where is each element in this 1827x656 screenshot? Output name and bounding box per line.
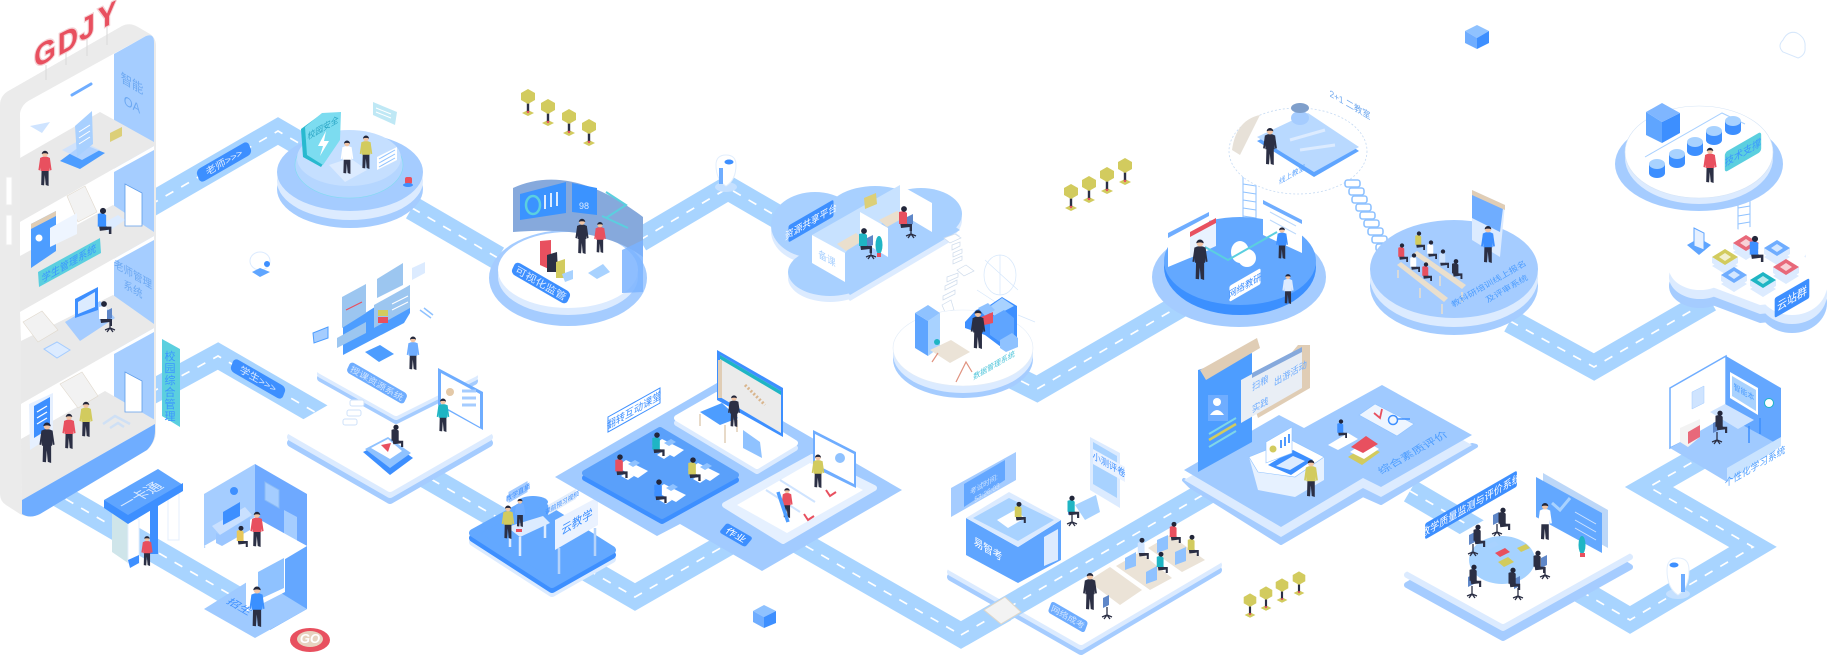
go sticker: GO [300,631,320,646]
floor 2 chart panels [31,211,77,268]
cloud teaching platform [473,480,612,593]
platform: online exam [951,482,1218,651]
rollup sign [1472,190,1505,257]
campus management sign: 管 [164,397,176,411]
person [249,587,265,627]
wire globe [977,255,1035,322]
floor 1 person [38,151,52,186]
tag: 数据管理系统 [973,348,1015,382]
right document panel: 实践 [1252,394,1269,416]
answer board [813,430,856,488]
student desks [616,439,720,504]
cloud: resource sharing platform [771,185,962,302]
tablet exercise pad [725,457,874,541]
person [407,337,419,370]
timer sign: 53:26:03 [974,481,1000,504]
link lines [1645,113,1745,157]
floating panel [373,102,397,125]
top cube [1465,25,1489,49]
person [971,310,985,349]
upper platform [321,327,474,420]
letters GDJY [34,0,117,80]
labels: 线上教室 [1279,161,1305,186]
label: teacher system: 系统 [123,278,143,301]
seated test taker [1067,495,1100,526]
meeting people [1467,508,1550,600]
floor 3 person [99,301,115,332]
cube stack [965,297,1018,352]
wedge [1232,115,1260,155]
server cabinet [915,305,940,356]
speaker [72,84,91,95]
monitor [343,285,410,362]
person [1263,128,1277,165]
floor [1670,416,1781,482]
pale rim [1669,234,1827,324]
cloud rim [771,192,962,302]
blue rim [1669,243,1827,333]
timer sign [951,452,1016,517]
panels [337,262,425,348]
phone shell [0,24,156,516]
one-card gate [104,469,183,568]
tag [1775,278,1809,318]
campus management sign [162,339,180,427]
dual classroom caption: 2+1 二教室 [1330,87,1370,123]
poster [1692,386,1704,409]
board: 智能本 [1734,381,1754,403]
road tag: students [230,358,286,400]
person [392,425,403,447]
road tag: teachers: 老师>>> [204,146,244,178]
tag: 授课资源系统 [349,364,405,403]
large monitor [717,350,783,437]
letters GDJY: D [58,18,78,63]
platform: teaching quality monitoring [1407,468,1630,638]
disk: dual teacher classroom [1229,87,1370,194]
doors [125,184,142,226]
teacher [1538,503,1552,540]
tag: 网络成考 [1050,603,1086,631]
plant [876,236,882,257]
wall text: 备课 [818,247,836,270]
person [1750,236,1763,262]
tag: 可视化监管 [513,264,568,303]
label: 及评审系统 [1484,272,1530,304]
cloud: cloud sites [1669,225,1827,333]
base [555,383,902,571]
cloud outline top right [1780,32,1805,58]
table items [1486,541,1530,567]
wall white 3 [21,328,154,439]
left wall [204,464,255,548]
room: personalized learning [1670,356,1785,490]
octagon desk [1249,440,1324,497]
pillar feet [128,555,139,568]
people [859,206,916,259]
people [341,136,372,174]
pencil [778,492,788,522]
road over exam platform [961,488,1215,635]
lab people [1138,522,1199,573]
resource tag: 课前预习视频 [545,488,579,517]
list panel [377,147,397,170]
door lower [125,372,142,412]
dark classroom [585,430,736,521]
right wall [1726,356,1781,446]
dormitory room and admissions [204,464,307,638]
lower platform [291,374,489,500]
floating stairs [942,234,974,312]
whiteboard: 云教学 [561,505,593,538]
tag: 教学质量监测与评价系统 [1421,470,1521,541]
person [141,536,153,566]
person at board [437,399,449,432]
curved screen: 98 [579,201,589,211]
homework tag [719,523,753,547]
person [1703,148,1717,183]
label: smart OA [121,70,143,117]
computer lab desks [1088,535,1205,605]
people [575,219,606,254]
exam building [966,492,1061,583]
robot two [1666,558,1690,599]
timer sign: 考试时间: [970,471,998,497]
stone steps [1345,180,1391,251]
desk [1710,404,1760,443]
tiles [1712,235,1799,297]
small test phone [1090,437,1126,508]
floor 3 [21,295,154,404]
bump [518,496,548,508]
audience [1398,231,1462,281]
window [265,482,279,508]
white top [1669,225,1827,315]
door [150,506,158,554]
phone building [0,0,156,517]
exam building: 易智考 [974,534,1002,564]
wall white 1 [20,146,154,256]
label: smart OA: 智能 [121,70,143,98]
disk layers [277,130,423,228]
campus management sign: 校 [164,349,176,363]
people [1192,227,1294,304]
small panel [743,430,762,458]
tag: 技术支撑 [1725,135,1762,169]
teacher [1481,226,1495,263]
glass side [112,510,128,563]
desk [507,516,550,556]
plant [1578,536,1586,557]
teacher desk [700,403,738,443]
tablet [363,437,413,475]
door [284,510,297,542]
floor 4 people [39,402,93,463]
disk: technical support [1615,103,1783,211]
standing proctor [1083,573,1097,610]
right document panel [1241,345,1310,423]
bottom cube [753,605,776,628]
whiteboard platform [677,395,795,471]
campus management sign: 园 [164,362,176,375]
alarm [403,177,413,187]
exercise lines [766,480,815,512]
teal front band [1727,437,1781,482]
small test phone: 小测评卷 [1093,450,1126,481]
right wall [255,464,307,546]
label: 教科研培训线上报名 [1449,258,1528,309]
disk layers [489,230,647,326]
lower floor [204,577,307,638]
go sticker [290,628,330,652]
left wall [1670,356,1726,448]
folder [864,193,877,209]
red box [979,312,993,326]
platforms: teaching resources [291,262,489,500]
under layer [1184,445,1476,543]
people [781,455,824,518]
floor 3 desk and monitor [44,287,115,358]
top face [1184,385,1472,527]
ladder between right disks [1738,184,1750,232]
campus management sign: 综 [164,373,176,387]
disk: campus security [277,102,423,228]
students [615,432,701,503]
bookshelf [1680,419,1700,447]
exam student [997,502,1026,528]
recognition board [438,368,483,430]
partition walls [812,185,932,282]
right panel [1263,200,1302,253]
roof edge [104,483,183,524]
desk [930,339,972,382]
benches [1397,251,1466,314]
board back [1543,473,1608,548]
right document panel: 扫粮 [1252,372,1269,394]
cloud top [771,186,962,296]
floor 1 document [30,111,122,169]
small tag: 教学直播 [506,481,530,504]
board [1536,477,1602,553]
floor 4 arrow [103,416,130,428]
robot [715,155,737,192]
trees group 3 [1244,571,1305,618]
student on pad [1328,419,1358,450]
tag: 翻转互动课堂 [607,388,661,433]
letters GDJY: G [34,30,56,75]
webcam [250,252,270,277]
tag: 资源共享平台 [785,200,837,243]
disk: teacher training enrollment [1370,190,1538,335]
desks [837,211,905,251]
road tag: students: 学生>>> [238,363,278,395]
label: smart OA: OA [124,92,140,117]
rim [1184,395,1472,537]
learner [1712,411,1727,444]
floor 4 board [29,393,53,450]
floor 4 [21,391,155,500]
letters GDJY: J [79,6,95,49]
roads network [50,131,1753,635]
check marks [804,490,836,520]
disk: visual supervision [489,180,647,326]
admissions board [246,553,285,612]
gate roof [104,469,183,519]
desk with monitor [212,502,252,546]
trees group 1 [521,89,596,146]
flipped classroom platform [555,350,902,571]
shield: 校园安全 [307,113,339,142]
phone screen [20,35,154,500]
floor 1 [20,112,154,222]
platform: comprehensive quality evaluation [1184,338,1476,543]
left side buttons [6,177,12,245]
white floor [204,517,307,577]
caption: 个性化学习系统 [1725,443,1785,490]
tablet [1257,113,1359,177]
teacher [728,395,740,427]
campus management sign: 理 [164,410,176,423]
right glass panel [622,240,643,293]
label: teacher system: 老师管理 [114,256,152,292]
building blocks [540,240,573,282]
homework tag: 作业 [723,526,749,545]
pale edge [473,500,612,593]
ladder up to top disk [1243,176,1256,228]
tag: student system: 学生管理系统 [42,241,97,286]
laptop [1266,427,1313,475]
books [1348,436,1380,465]
campus management sign: 合 [164,385,176,399]
left panel [1168,212,1216,267]
lower right wall [255,546,307,630]
right column [114,35,154,425]
cylinders [1649,116,1741,178]
stairs [23,186,98,408]
tag: 云站群 [1777,283,1807,314]
network cloud [1205,232,1277,267]
pillars [128,494,179,563]
clock [230,487,238,495]
zebra crossing [984,597,1021,624]
server [1646,103,1680,143]
shield [301,112,341,167]
disk: network teaching and research [1152,200,1326,327]
tag: 网络教研 [1229,270,1262,301]
clock [1764,398,1774,408]
road tag: teachers [196,141,252,183]
people [502,499,525,539]
right document panel: 出游活动 [1274,358,1307,389]
steps [343,400,364,425]
floor pad [588,264,610,279]
floor 2 [20,205,154,312]
chair [1102,595,1112,619]
disk: data management [893,297,1033,398]
people in room [237,512,264,547]
phone base band [22,424,155,516]
cylinder [1291,103,1309,125]
admissions text: 招生 [224,596,256,617]
person [1304,460,1318,497]
report with magnifier [1359,404,1414,436]
caption: 综合素质评价 [1375,428,1451,476]
meeting table [1469,536,1535,584]
gate text: 一卡通 [114,480,168,511]
curved screen [513,180,643,257]
phone hologram [1687,228,1711,255]
chart pad [329,158,367,182]
wall white 2 [20,236,154,341]
back wall [812,185,900,253]
wifi icon [420,308,433,318]
trees group 2 [1064,158,1132,211]
tall profile panel [1198,338,1260,472]
floor 2 person with laptop [98,208,125,234]
exam content [951,437,1205,633]
folder [313,327,328,343]
